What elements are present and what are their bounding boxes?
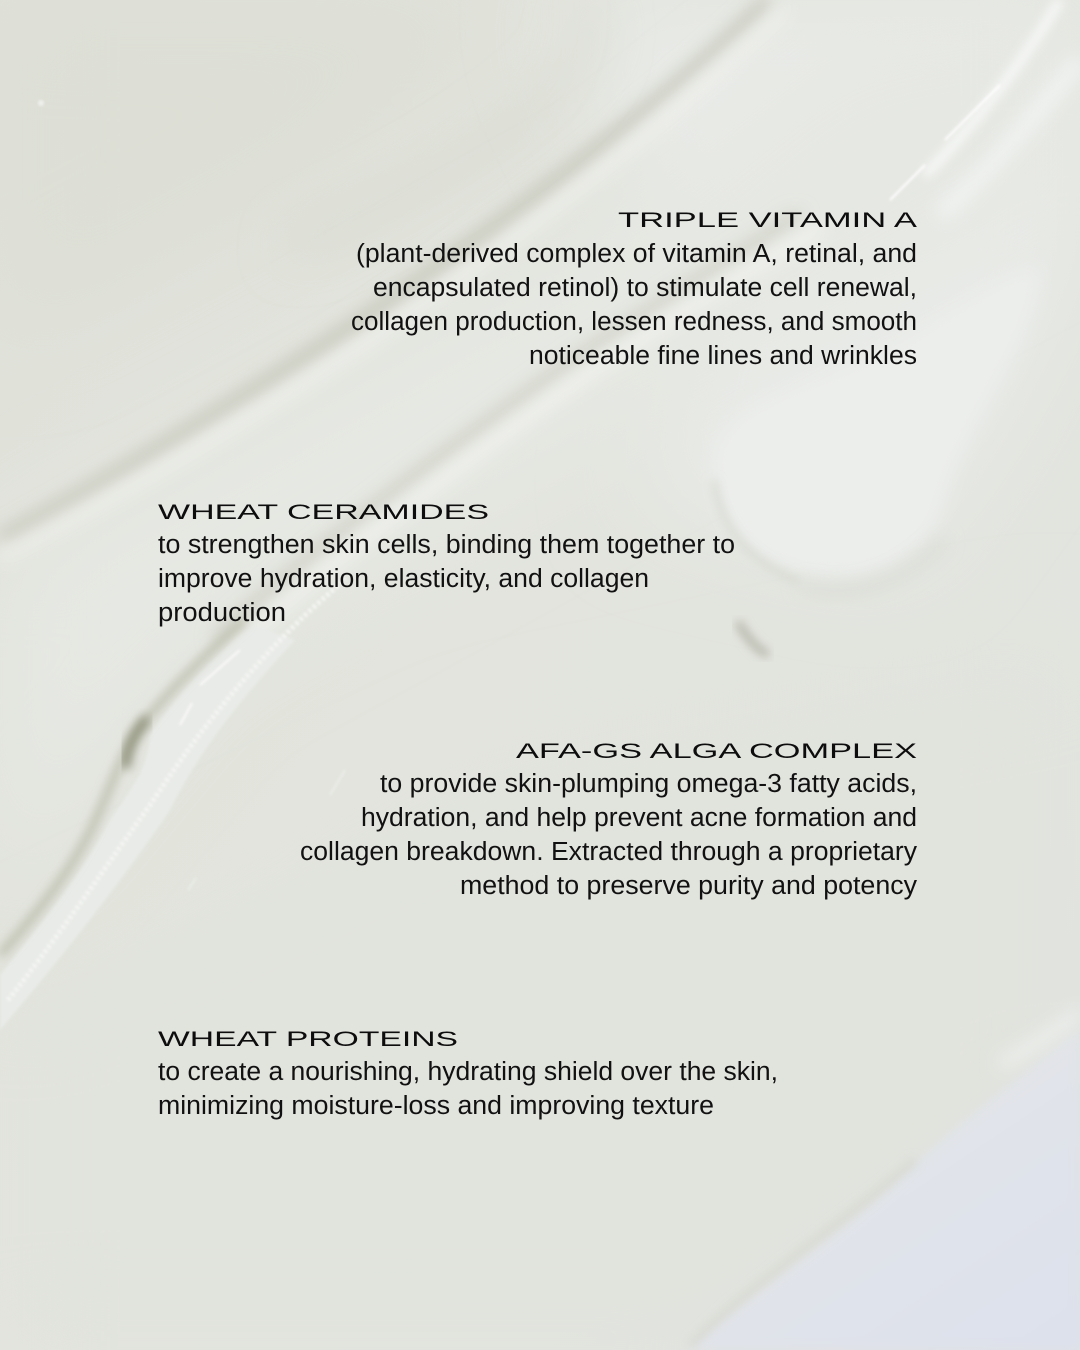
description: Wheat Ceramides xyxy=(158,531,735,627)
description: Triple Vitamin A xyxy=(351,240,917,370)
upper diagonal fold xyxy=(0,0,770,540)
description: Triple Vitamin A: (plant-derived complex of vitamin A, retinal, and xyxy=(356,240,917,268)
heading: Triple Vitamin A: TRIPLE VITAMIN A xyxy=(618,209,917,232)
description: Wheat Proteins: minimizing moisture-loss and improving texture xyxy=(158,1092,714,1120)
text block: AFA-GS Alga Complex xyxy=(300,740,917,900)
description: Triple Vitamin A: noticeable fine lines and wrinkles xyxy=(529,342,917,370)
lower-left ridge shadow xyxy=(0,620,245,955)
small specks xyxy=(38,100,44,106)
right glossy highlight xyxy=(925,0,1060,175)
description: Triple Vitamin A: encapsulated retinol) to stimulate cell renewal, xyxy=(373,274,917,302)
description: AFA-GS Alga Complex: method to preserve purity and potency xyxy=(460,872,917,900)
cream dollop xyxy=(713,268,1040,576)
secondary fold xyxy=(215,215,800,640)
description: AFA-GS Alga Complex: collagen breakdown. Extracted through a proprietary xyxy=(300,838,917,866)
description: Wheat Ceramides: production xyxy=(158,599,286,627)
description: AFA-GS Alga Complex: hydration, and help prevent acne formation and xyxy=(361,804,917,832)
text block: Wheat Proteins xyxy=(158,1028,778,1120)
heading: AFA-GS Alga Complex: AFA-GS ALGA COMPLEX xyxy=(516,740,917,763)
description: Wheat Ceramides: improve hydration, elasticity, and collagen xyxy=(158,565,649,593)
heading: Wheat Ceramides: WHEAT CERAMIDES xyxy=(158,501,489,524)
lower-right blue cream xyxy=(690,1030,1080,1350)
lower-left ridge sparkle xyxy=(8,578,345,1000)
description: AFA-GS Alga Complex xyxy=(300,770,917,900)
lower-left ridge body xyxy=(0,625,295,1030)
description: AFA-GS Alga Complex: to provide skin-plumping omega-3 fatty acids, xyxy=(380,770,917,798)
heading: Wheat Proteins: WHEAT PROTEINS xyxy=(158,1028,458,1051)
description: Wheat Ceramides: to strengthen skin cells, binding them together to xyxy=(158,531,735,559)
description: Wheat Proteins: to create a nourishing, hydrating shield over the skin, xyxy=(158,1058,778,1086)
description: Triple Vitamin A: collagen production, lessen redness, and smooth xyxy=(351,308,917,336)
text block: Triple Vitamin A xyxy=(351,209,917,370)
text block: Wheat Ceramides xyxy=(158,501,735,627)
description: Wheat Proteins xyxy=(158,1058,778,1120)
